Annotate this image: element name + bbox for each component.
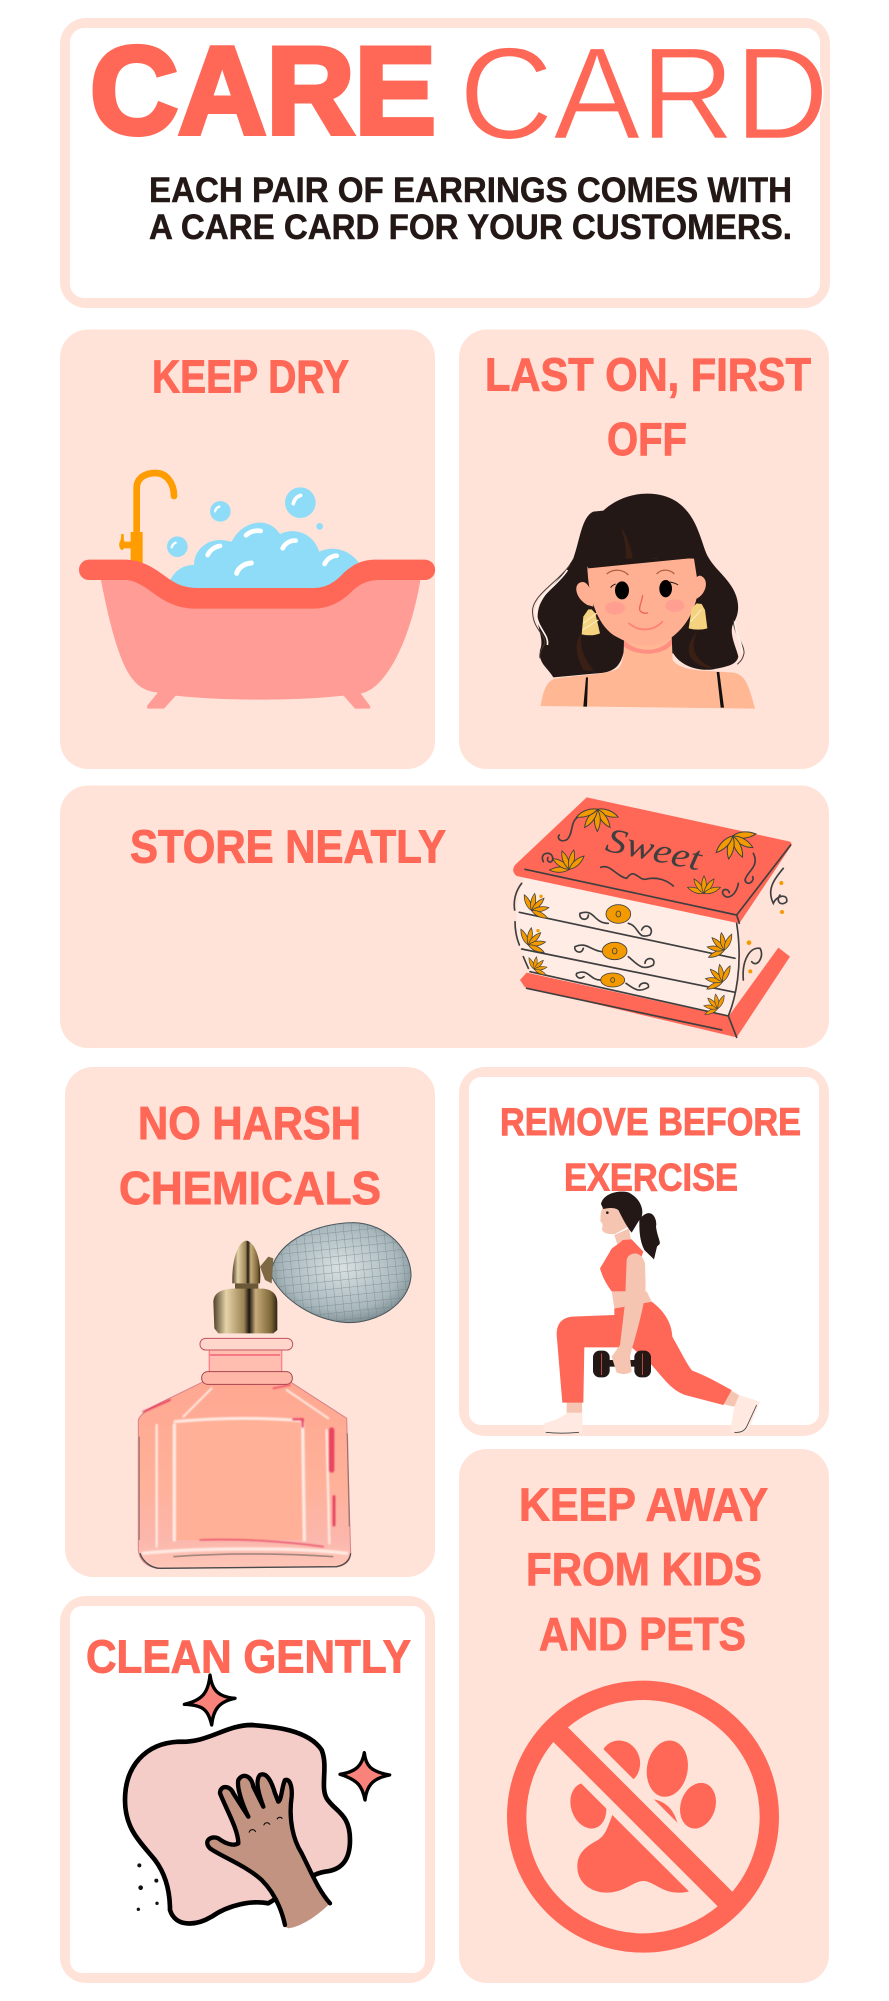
icon: no pets sign — [517, 1690, 769, 1943]
heading: keep away from kids and pets: FROM KIDS — [526, 1543, 762, 1595]
heading: keep away from kids and pets — [519, 1478, 768, 1660]
heading: remove before exercise: REMOVE BEFORE — [500, 1101, 801, 1144]
title: CARE CARD: CARD — [459, 20, 829, 166]
label on box lid: Sweet — [603, 821, 707, 879]
icon: perfume bottle — [138, 1220, 413, 1568]
icon: hand wiping with cloth — [125, 1675, 390, 1928]
panel: last on, first off — [459, 330, 829, 769]
heading: keep away from kids and pets: KEEP AWAY — [519, 1478, 768, 1530]
subtitle text — [149, 171, 792, 247]
heading: no harsh chemicals — [119, 1097, 381, 1214]
heading: remove before exercise — [500, 1101, 801, 1200]
heading: store neatly: STORE NEATLY — [130, 820, 446, 872]
panel: remove before exercise — [459, 1067, 829, 1436]
panel: store neatly — [60, 786, 829, 1048]
title: CARE CARD: CARE — [90, 22, 436, 160]
panel: title card — [60, 18, 830, 308]
heading: last on, first off: LAST ON, FIRST — [485, 348, 811, 400]
subtitle text: A CARE CARD FOR YOUR CUSTOMERS. — [149, 208, 792, 247]
panel: clean gently — [60, 1596, 435, 1983]
heading: no harsh chemicals: NO HARSH — [138, 1097, 361, 1149]
heading: remove before exercise: EXERCISE — [564, 1156, 738, 1200]
icon: woman with earrings — [532, 494, 755, 709]
heading: last on, first off — [485, 348, 811, 465]
title: CARE CARD — [90, 20, 829, 166]
heading: keep away from kids and pets: AND PETS — [539, 1608, 746, 1660]
panel: keep dry — [60, 330, 435, 769]
heading: last on, first off: OFF — [607, 413, 687, 465]
heading: no harsh chemicals: CHEMICALS — [119, 1162, 381, 1214]
icon: stacked jewellery box — [513, 797, 792, 1037]
subtitle text: EACH PAIR OF EARRINGS COMES WITH — [149, 171, 792, 210]
heading: keep dry: KEEP DRY — [152, 350, 349, 402]
panel: no harsh chemicals — [65, 1067, 435, 1577]
panel: keep away from kids and pets — [459, 1449, 829, 1983]
icon: bathtub with bubbles — [79, 473, 435, 709]
icon: woman lunging with dumbbell — [543, 1192, 760, 1433]
heading: clean gently: CLEAN GENTLY — [86, 1630, 411, 1682]
